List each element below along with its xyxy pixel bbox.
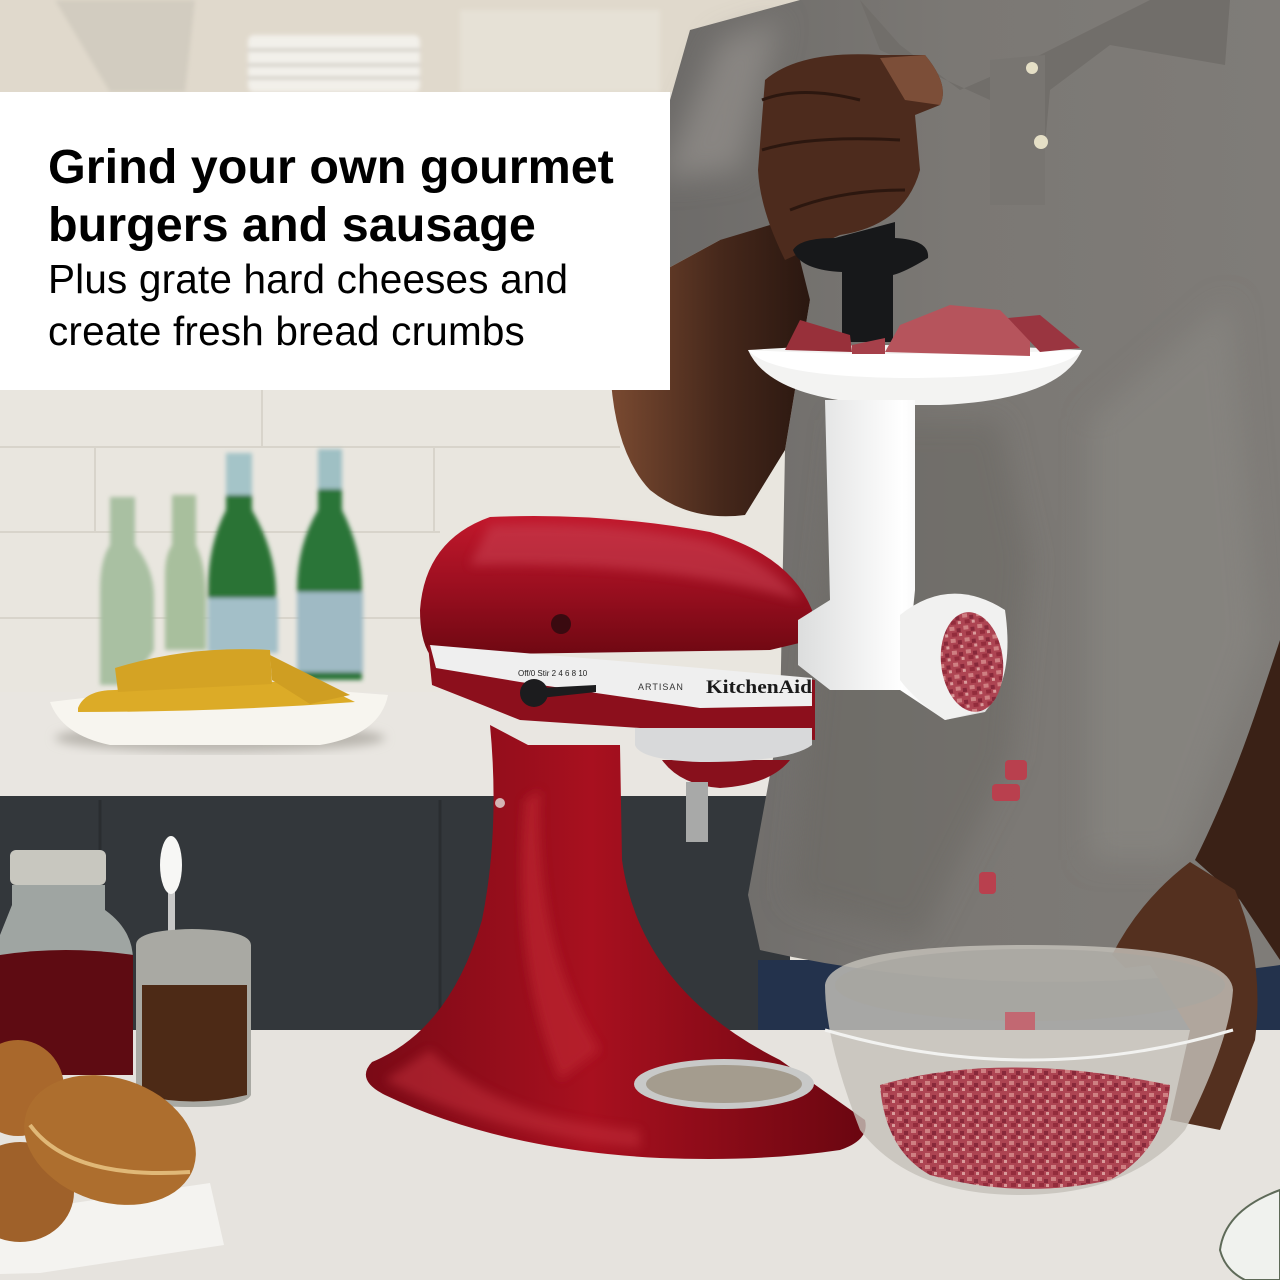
tray (0, 1183, 224, 1274)
mixer: speed band and badge: Off/0 Stir 2 4 6 8 10 (518, 669, 588, 678)
person: left arm (610, 225, 810, 516)
grinder tray (748, 345, 1082, 405)
subheading: Plus grate hard cheeses and (48, 256, 568, 302)
background glassware and plates (55, 0, 660, 92)
grinder plunger (793, 222, 928, 342)
hand on plunger (758, 54, 943, 260)
heading: Grind your own gourmet (48, 140, 614, 194)
person: right arm (1195, 640, 1280, 960)
heading (48, 140, 614, 252)
spoon and jar of mustard (136, 836, 251, 1107)
heading: burgers and sausage (48, 198, 536, 252)
shirt shading (660, 20, 1260, 940)
subheading (48, 256, 568, 354)
meat on tray (785, 305, 1080, 356)
person: trousers (758, 960, 1280, 1030)
mixer: bowl ring and beater shaft (635, 728, 812, 842)
person: shirt (628, 0, 1280, 982)
mixer: speed band and badge: KitchenAid (706, 677, 812, 698)
subheading: create fresh bread crumbs (48, 308, 525, 354)
side plate (1220, 1190, 1280, 1280)
mixer: head (420, 516, 815, 740)
background bottles (100, 449, 363, 685)
plate of corn (50, 649, 388, 752)
falling meat (979, 760, 1027, 894)
mixer: speed band and badge (430, 645, 812, 708)
grinder body (798, 400, 1008, 720)
mixer: pedestal (366, 725, 866, 1159)
back counter (0, 692, 790, 1036)
glass bowl of ground meat (825, 945, 1233, 1195)
mixer: speed band and badge: ARTISAN (638, 682, 684, 692)
hand on bowl (1112, 862, 1258, 1130)
mixer: pedestal highlight and bowl mount (385, 790, 814, 1148)
jar of jam (0, 850, 133, 1075)
front counter (0, 1030, 1280, 1280)
ground meat in grinder (936, 609, 1008, 715)
person: collar and placket (860, 0, 1230, 205)
white text panel (0, 92, 670, 390)
buns (0, 1040, 213, 1242)
